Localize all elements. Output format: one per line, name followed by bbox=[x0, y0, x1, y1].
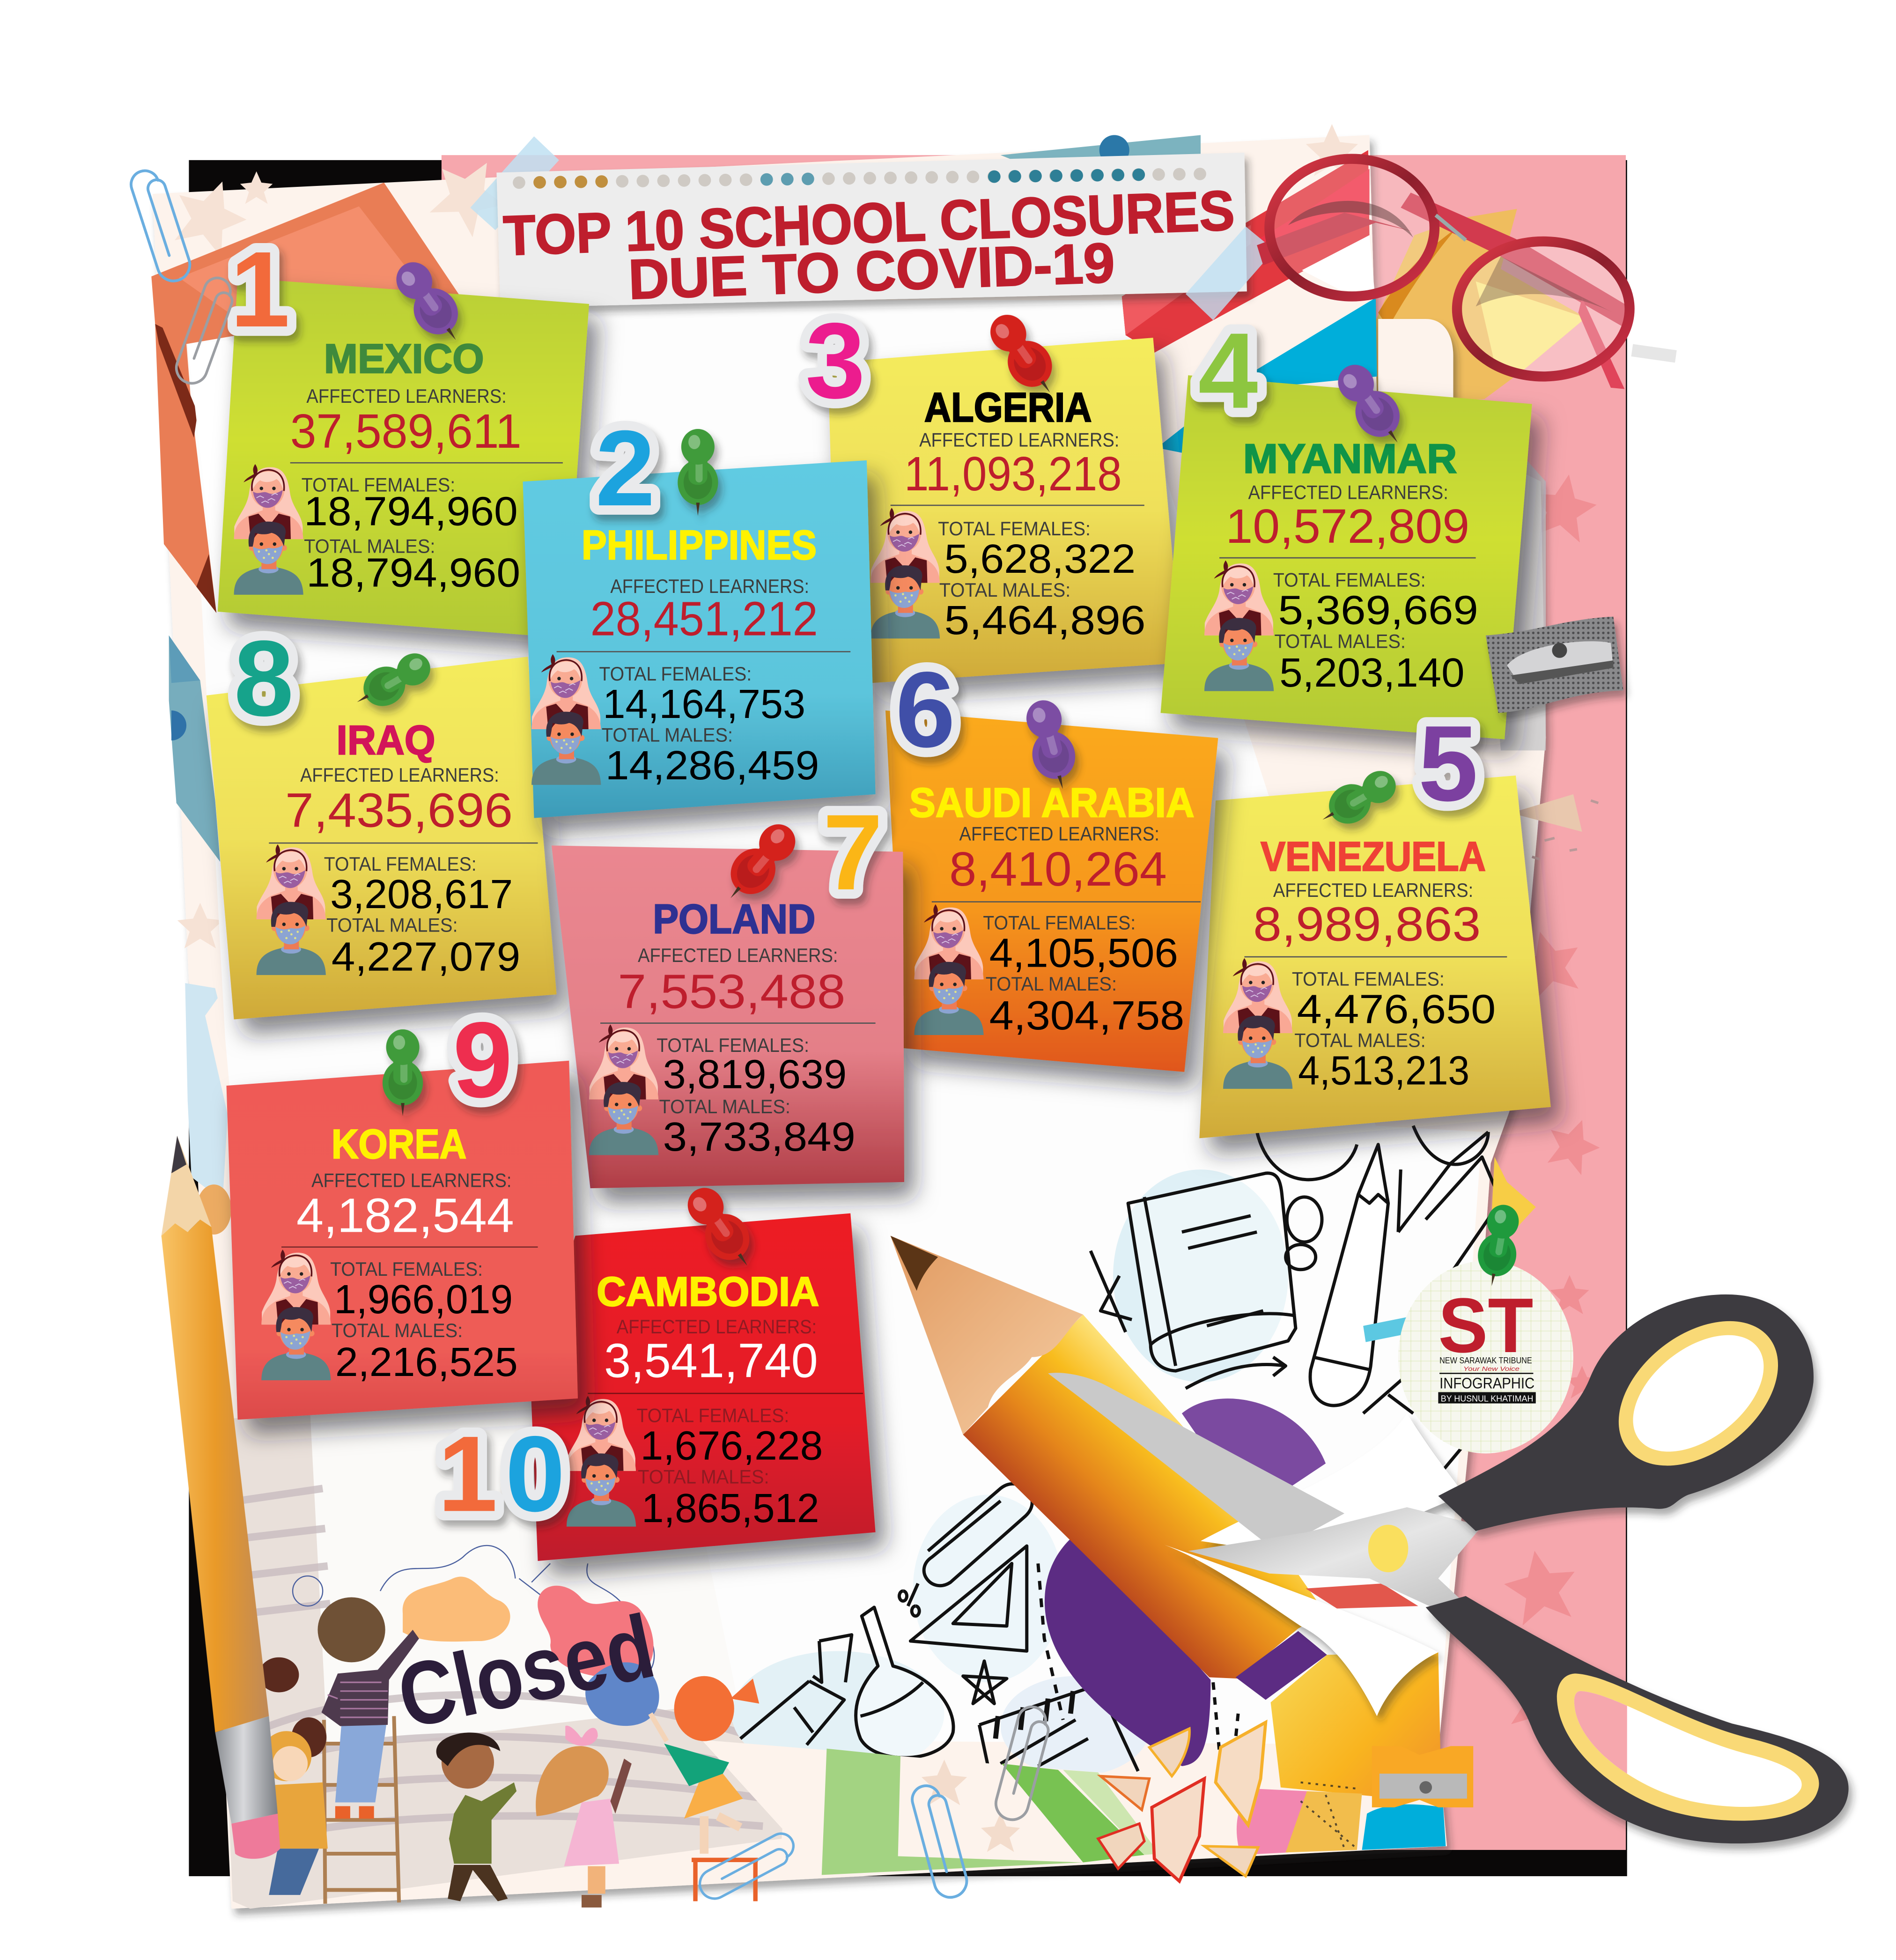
purple mask blobs bbox=[1045, 1398, 1326, 1766]
near temple bbox=[1401, 192, 1624, 328]
people icon bbox=[1223, 958, 1292, 1089]
yellow leaf shape behind glasses bbox=[1376, 209, 1586, 400]
males: TOTAL MALES: bbox=[326, 915, 458, 936]
doodle book bbox=[1128, 1173, 1296, 1371]
scissors pivot body bbox=[1188, 1507, 1482, 1613]
people icon bbox=[871, 508, 940, 638]
title bbox=[502, 179, 1236, 311]
girl in pink dress bbox=[536, 1726, 632, 1908]
females number: 4,476,650 bbox=[1297, 987, 1496, 1032]
females number: 3,819,639 bbox=[663, 1052, 847, 1097]
people icon bbox=[531, 654, 601, 785]
doodle pencil bbox=[1310, 1145, 1388, 1405]
rank 2: 2 bbox=[595, 408, 655, 528]
closed text: Closed bbox=[390, 1595, 663, 1747]
people icon bbox=[1204, 560, 1274, 691]
pencil shavings right bbox=[1511, 794, 1598, 859]
males: TOTAL MALES: bbox=[1275, 630, 1406, 652]
pencil lead bbox=[891, 1236, 938, 1291]
orange sharpener bbox=[1372, 1746, 1473, 1807]
people icon bbox=[257, 844, 326, 975]
females: TOTAL FEMALES: bbox=[983, 912, 1136, 933]
rank 9: 9 bbox=[453, 999, 513, 1120]
metal sharpener bbox=[1486, 617, 1623, 713]
title sheet bbox=[496, 153, 1247, 311]
females: TOTAL FEMALES: bbox=[1273, 570, 1426, 591]
affected label: AFFECTED LEARNERS: bbox=[610, 576, 809, 597]
affected number: 37,589,611 bbox=[290, 404, 522, 458]
rank 4: 4 bbox=[1198, 311, 1258, 431]
top right coloured shapes bbox=[1001, 135, 1546, 750]
males: TOTAL MALES: bbox=[986, 973, 1117, 995]
affected number: 7,553,488 bbox=[618, 965, 846, 1019]
punch holes bbox=[519, 174, 1207, 183]
glasses bbox=[1257, 159, 1676, 389]
note 7: Poland bbox=[552, 845, 904, 1188]
country name: CAMBODIA bbox=[597, 1268, 819, 1315]
females: TOTAL FEMALES: bbox=[599, 663, 752, 685]
ST letters: ST bbox=[1438, 1282, 1533, 1369]
scissors upper handle bbox=[1438, 1292, 1814, 1531]
males number: 4,304,758 bbox=[989, 993, 1184, 1038]
pivot bbox=[1368, 1525, 1408, 1572]
country name: MYANMAR bbox=[1243, 436, 1457, 482]
credit: BY HUSNUL KHATIMAH bbox=[1441, 1394, 1533, 1404]
blue tape bbox=[470, 136, 1416, 1342]
females: TOTAL FEMALES: bbox=[302, 474, 455, 496]
title: TOP 10 SCHOOL CLOSURES bbox=[502, 179, 1236, 267]
boy with crayon bbox=[436, 1732, 516, 1901]
country name: PHILIPPINES bbox=[582, 522, 817, 568]
cream paper sheet bbox=[153, 124, 1546, 1909]
country name: VENEZUELA bbox=[1261, 833, 1486, 880]
people icon bbox=[261, 1250, 331, 1380]
girl with red hair bbox=[650, 1676, 759, 1901]
males number: 5,203,140 bbox=[1279, 650, 1465, 695]
scissors bbox=[1048, 1292, 1849, 1843]
far temple bbox=[1257, 213, 1413, 265]
females number: 5,369,669 bbox=[1278, 588, 1478, 633]
country name: POLAND bbox=[653, 895, 815, 942]
note 10: Cambodia bbox=[530, 1213, 876, 1561]
left teal bottle shape bbox=[169, 636, 231, 1235]
title corner tape bbox=[1186, 226, 1275, 320]
note 5: Venezuela bbox=[1199, 776, 1551, 1138]
affected label: AFFECTED LEARNERS: bbox=[306, 385, 507, 407]
males: TOTAL MALES: bbox=[304, 535, 435, 557]
pencil wood tip bbox=[891, 1236, 1083, 1435]
paper clips bbox=[127, 166, 1054, 1904]
pencil purple band bbox=[1236, 1631, 1327, 1700]
boy behind pencil bbox=[261, 1717, 328, 1895]
eraser bbox=[231, 1814, 280, 1859]
ST logo tag bbox=[1398, 1157, 1573, 1453]
doodle eraser and notebook bbox=[740, 1661, 1238, 1776]
females number: 18,794,960 bbox=[304, 489, 518, 534]
note 3: Algeria bbox=[828, 338, 1182, 683]
tagline: Your New Voice bbox=[1463, 1365, 1520, 1372]
title: DUE TO COVID-19 bbox=[627, 231, 1116, 311]
males number: 4,513,213 bbox=[1298, 1048, 1469, 1094]
note 8: Iraq bbox=[207, 657, 557, 1020]
affected label: AFFECTED LEARNERS: bbox=[1273, 880, 1473, 901]
pencil shavings and orange sharpener bbox=[1098, 1723, 1473, 1881]
doodle paper clip and set square bbox=[899, 1484, 1032, 1651]
females number: 1,966,019 bbox=[334, 1277, 513, 1322]
note 9: Korea bbox=[227, 1061, 578, 1420]
country name: IRAQ bbox=[337, 717, 435, 763]
males: TOTAL MALES: bbox=[939, 579, 1070, 601]
affected label: AFFECTED LEARNERS: bbox=[617, 1316, 817, 1338]
rank 8: 8 bbox=[234, 618, 294, 739]
pink backing sheet bbox=[442, 155, 1626, 1850]
affected label: AFFECTED LEARNERS: bbox=[311, 1170, 511, 1191]
affected label: AFFECTED LEARNERS: bbox=[638, 945, 838, 966]
country name: MEXICO bbox=[324, 335, 484, 382]
males number: 1,865,512 bbox=[642, 1486, 819, 1531]
rank 10: 0 bbox=[505, 1413, 565, 1534]
females number: 14,164,753 bbox=[603, 681, 805, 727]
white work sheet bbox=[188, 300, 1482, 1876]
affected number: 8,410,264 bbox=[949, 842, 1167, 896]
females: TOTAL FEMALES: bbox=[1292, 969, 1445, 990]
note 6: Saudi Arabia bbox=[885, 710, 1218, 1072]
rank 6: 6 bbox=[895, 649, 955, 769]
rank 7: 7 bbox=[823, 792, 883, 912]
black backing sheet bbox=[189, 160, 1627, 1876]
scissors lower handle bbox=[1426, 1596, 1849, 1843]
affected number: 7,435,696 bbox=[285, 783, 513, 837]
note 1: Mexico bbox=[218, 278, 589, 638]
males number: 14,286,459 bbox=[605, 743, 819, 788]
affected number: 11,093,218 bbox=[904, 447, 1122, 501]
rank 1: 1 bbox=[230, 229, 290, 349]
children painting bbox=[259, 1577, 759, 1908]
affected label: AFFECTED LEARNERS: bbox=[959, 823, 1159, 845]
affected number: 28,451,212 bbox=[590, 592, 818, 646]
small yellow pencil bbox=[162, 1136, 280, 1859]
boy on ladder bbox=[259, 1597, 419, 1904]
males number: 4,227,079 bbox=[332, 934, 520, 979]
right lens bbox=[1457, 241, 1630, 377]
affected number: 4,182,544 bbox=[296, 1189, 514, 1243]
country name: ALGERIA bbox=[924, 384, 1092, 430]
orange book bbox=[151, 183, 463, 613]
country name: SAUDI ARABIA bbox=[909, 779, 1195, 826]
affected label: AFFECTED LEARNERS: bbox=[1248, 482, 1448, 503]
infographic label: INFOGRAPHIC bbox=[1439, 1375, 1535, 1391]
females number: 5,628,322 bbox=[944, 536, 1136, 582]
males number: 3,733,849 bbox=[663, 1114, 856, 1160]
rounded cream tab bbox=[1378, 319, 1453, 407]
pencil tail bbox=[1271, 1652, 1441, 1796]
note 4: Myanmar bbox=[1161, 375, 1532, 739]
affected number: 10,572,809 bbox=[1225, 499, 1469, 553]
lined paper bottom left bbox=[213, 1398, 788, 1909]
ferrule bbox=[215, 1716, 278, 1824]
males: TOTAL MALES: bbox=[602, 725, 733, 746]
left lens bbox=[1269, 159, 1434, 296]
affected label: AFFECTED LEARNERS: bbox=[919, 429, 1119, 451]
note 2: Philippines bbox=[523, 460, 876, 818]
doodle flask bbox=[813, 1607, 953, 1758]
females: TOTAL FEMALES: bbox=[938, 518, 1091, 540]
females number: 4,105,506 bbox=[989, 930, 1178, 976]
doodles: school supplies bbox=[731, 1126, 1501, 1776]
push pins bbox=[347, 253, 1415, 1278]
males: TOTAL MALES: bbox=[638, 1466, 769, 1487]
females: TOTAL FEMALES: bbox=[657, 1035, 809, 1056]
big pencil bbox=[891, 1236, 1446, 1855]
affected number: 3,541,740 bbox=[604, 1333, 818, 1387]
females number: 1,676,228 bbox=[641, 1423, 823, 1469]
people icon bbox=[234, 464, 303, 595]
females number: 3,208,617 bbox=[330, 872, 513, 917]
closed paint blobs bbox=[403, 1577, 510, 1642]
females: TOTAL FEMALES: bbox=[330, 1258, 483, 1280]
pink and blue paint scraps bbox=[1237, 1782, 1446, 1855]
rank number stickers bbox=[230, 229, 1478, 1534]
males number: 2,216,525 bbox=[335, 1339, 518, 1385]
males number: 18,794,960 bbox=[306, 550, 520, 596]
rank 3: 3 bbox=[805, 300, 865, 421]
males number: 5,464,896 bbox=[944, 598, 1145, 643]
males: TOTAL MALES: bbox=[659, 1096, 790, 1117]
affected number: 8,989,863 bbox=[1253, 897, 1481, 951]
males: TOTAL MALES: bbox=[332, 1320, 463, 1341]
rank 10: 1 bbox=[438, 1413, 498, 1534]
people icon bbox=[589, 1024, 658, 1155]
lower strip scraps bbox=[701, 1740, 1446, 1875]
males: TOTAL MALES: bbox=[1294, 1029, 1426, 1051]
females: TOTAL FEMALES: bbox=[324, 853, 477, 875]
rank 10 bbox=[438, 1413, 565, 1534]
curling paper bbox=[1165, 1413, 1463, 1716]
rank 5: 5 bbox=[1418, 703, 1478, 823]
affected label: AFFECTED LEARNERS: bbox=[300, 764, 499, 786]
females: TOTAL FEMALES: bbox=[636, 1405, 789, 1427]
people icon bbox=[914, 904, 984, 1035]
publisher name: NEW SARAWAK TRIBUNE bbox=[1439, 1355, 1532, 1365]
scissors upper blade bbox=[1048, 1373, 1344, 1551]
pencil body bbox=[963, 1315, 1326, 1679]
country name: KOREA bbox=[332, 1121, 466, 1167]
people icon bbox=[567, 1396, 636, 1527]
